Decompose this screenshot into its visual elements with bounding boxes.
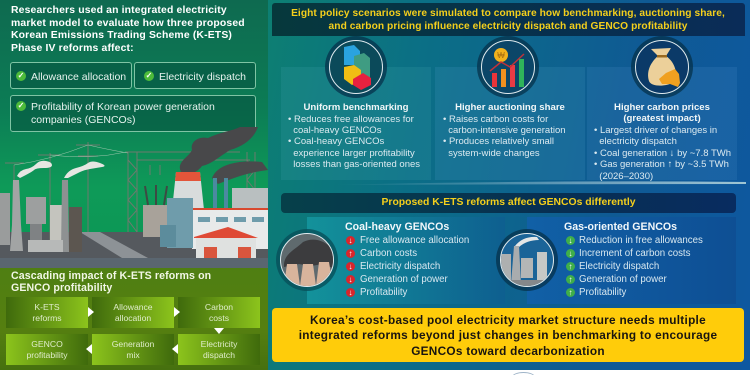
reforms banner [281, 193, 736, 212]
card bullets: • Coal generation ↓ by ~7.8 TWh [594, 148, 731, 159]
card bullets: system-wide changes [448, 148, 540, 159]
down arrow [346, 275, 355, 284]
step: K-ETS reforms: K-ETS [34, 302, 60, 312]
item [566, 248, 690, 259]
item [346, 248, 417, 259]
logo seal [512, 372, 535, 375]
down arrow: ↓ [348, 236, 352, 245]
check icon: ✓ [18, 101, 24, 110]
card bullets: experience larger profitability [293, 148, 415, 159]
conclusion callout [272, 308, 744, 362]
intro text: market model to evaluate how three proposed [11, 18, 245, 29]
scenarios heading: Eight policy scenarios were simulated to compare how benchmarking, auctioning share, [291, 8, 725, 19]
card: uniform benchmarking [281, 67, 431, 180]
panel: cascading impact [0, 268, 268, 370]
icon: coal cooling towers [280, 233, 334, 287]
step: generation mix [92, 334, 174, 365]
text: Increment of carbon costs [579, 248, 690, 259]
down arrow: ↓ [568, 236, 572, 245]
up arrow: ↑ [568, 275, 572, 284]
label [31, 101, 215, 126]
step: electricity dispatch [178, 334, 260, 365]
down arrow [566, 236, 575, 245]
cascade heading: GENCO profitability [11, 282, 112, 294]
text: Electricity dispatch [360, 261, 440, 272]
label: Electricity dispatch [159, 70, 246, 82]
up arrow [566, 262, 575, 271]
card heading [614, 102, 710, 124]
text: Profitability [360, 287, 407, 298]
down arrow: ↓ [348, 275, 352, 284]
card bullets: • Raises carbon costs for [443, 114, 548, 124]
check icon: ✓ [146, 71, 152, 80]
card: higher carbon prices [587, 67, 737, 180]
card bullets: • Gas generation ↑ by ~3.5 TWh [594, 159, 729, 170]
card bullets [594, 125, 731, 182]
intro text [11, 5, 245, 54]
up arrow [346, 249, 355, 258]
label: Allowance allocation [31, 70, 126, 82]
icon: coin and rising bars [481, 40, 535, 94]
step: GENCO profitability: profitability [26, 350, 68, 360]
step: GENCO profitability: GENCO [31, 339, 63, 349]
check icon [16, 71, 26, 81]
text: Profitability [579, 287, 626, 298]
panel: left research context [0, 0, 270, 268]
conclusion callout: GENCOs toward decarbonization [411, 344, 605, 358]
conclusion callout: Korea’s cost-based pool electricity market structure needs multiple [310, 313, 706, 327]
card heading: (greatest impact) [623, 113, 701, 124]
step: generation mix: mix [126, 350, 140, 360]
step: K-ETS reforms: reforms [32, 312, 62, 322]
check icon: ✓ [18, 71, 24, 80]
card bullets: carbon-intensive generation [448, 125, 566, 136]
check icon [16, 101, 26, 111]
text: Generation of power [579, 274, 667, 285]
label: companies (GENCOs) [31, 114, 135, 126]
down arrow: ↓ [348, 288, 352, 297]
down arrow [566, 249, 575, 258]
step: electricity dispatch: Electricity [201, 339, 237, 349]
conclusion callout: integrated reforms beyond just changes in benchmarking to encourage [299, 328, 717, 342]
cascade heading: Cascading impact of K-ETS reforms on [11, 270, 211, 282]
step: GENCO profitability [6, 334, 88, 365]
step: carbon costs [178, 297, 260, 328]
icon: coin and rising bars: ₩ [497, 51, 505, 60]
item [566, 235, 703, 246]
card bullets: losses than gas-oriented ones [293, 159, 420, 170]
icon: stacked blocks [329, 40, 383, 94]
box: profitability [10, 95, 256, 132]
card heading: Higher carbon prices [614, 102, 710, 112]
up arrow: ↑ [348, 249, 352, 258]
card bullets: • Largest driver of changes in [594, 125, 717, 136]
card bullets: (2026–2030) [599, 171, 653, 182]
scenarios heading: and carbon pricing influence electricity dispatch and GENCO profitability [329, 21, 687, 32]
card bullets: • Coal-heavy GENCOs [288, 136, 384, 147]
intro text: Korean Emissions Trading Scheme (K-ETS) [11, 30, 232, 41]
reforms banner: Proposed K-ETS reforms affect GENCOs differently [381, 197, 636, 208]
step: K-ETS reforms [6, 297, 88, 328]
down arrow: ↓ [348, 262, 352, 271]
illustration: power plants and transmission lines [0, 127, 268, 268]
text: Free allowance allocation [360, 235, 469, 246]
panel: coal-heavy GENCOs [307, 217, 505, 304]
up arrow [566, 275, 575, 284]
cascade heading [11, 270, 211, 294]
intro text: Researchers used an integrated electricity [11, 5, 227, 16]
icon: money bag [635, 40, 689, 94]
up arrow [566, 288, 575, 297]
text: Electricity dispatch [579, 261, 659, 272]
box: allowance allocation [10, 62, 132, 89]
card heading: Higher auctioning share [455, 102, 565, 112]
card bullets: • Reduces free allowances for [288, 114, 414, 124]
step: allowance allocation [92, 297, 174, 328]
check icon [144, 71, 154, 81]
text: Carbon costs [360, 248, 417, 259]
card: higher auctioning share [435, 67, 585, 180]
panel: policy scenarios backdrop [268, 0, 750, 370]
item [566, 261, 659, 272]
step: generation mix: Generation [112, 339, 154, 349]
step: allowance allocation: Allowance [113, 302, 153, 312]
box: electricity dispatch [134, 62, 256, 89]
down arrow: ↓ [568, 249, 572, 258]
item [346, 261, 440, 272]
scenarios heading [291, 8, 725, 32]
card heading: Uniform benchmarking [303, 102, 408, 112]
up arrow: ↑ [568, 288, 572, 297]
down arrow [346, 288, 355, 297]
card bullets: coal-heavy GENCOs [293, 125, 381, 136]
step: carbon costs: costs [209, 312, 229, 322]
card bullets [443, 114, 566, 159]
coal heading: Coal-heavy GENCOs [345, 221, 449, 233]
card bullets: • Produces relatively small [443, 136, 554, 147]
item [566, 287, 626, 298]
step: electricity dispatch: dispatch [203, 350, 235, 360]
item [346, 235, 469, 246]
step: allowance allocation: allocation [115, 312, 151, 322]
card bullets [288, 114, 420, 170]
card bullets: electricity dispatch [599, 136, 677, 147]
arrow [172, 344, 178, 354]
arrow [86, 344, 92, 354]
header band [272, 3, 745, 36]
panel: gas-oriented GENCOs [527, 217, 736, 304]
intro text: Phase IV reforms affect: [11, 43, 134, 54]
text: Generation of power [360, 274, 448, 285]
gas heading: Gas-oriented GENCOs [564, 221, 677, 233]
item [346, 274, 448, 285]
item [566, 274, 667, 285]
label: Profitability of Korean power generation [31, 101, 215, 113]
arrow [214, 328, 224, 334]
arrow [174, 307, 180, 317]
text: Reduction in free allowances [579, 235, 703, 246]
decorative light wave [366, 181, 746, 185]
item [346, 287, 408, 298]
icon: gas plant [500, 233, 554, 287]
down arrow [346, 262, 355, 271]
step: carbon costs: Carbon [205, 302, 233, 312]
arrow [88, 307, 94, 317]
down arrow [346, 236, 355, 245]
up arrow: ↑ [568, 262, 572, 271]
